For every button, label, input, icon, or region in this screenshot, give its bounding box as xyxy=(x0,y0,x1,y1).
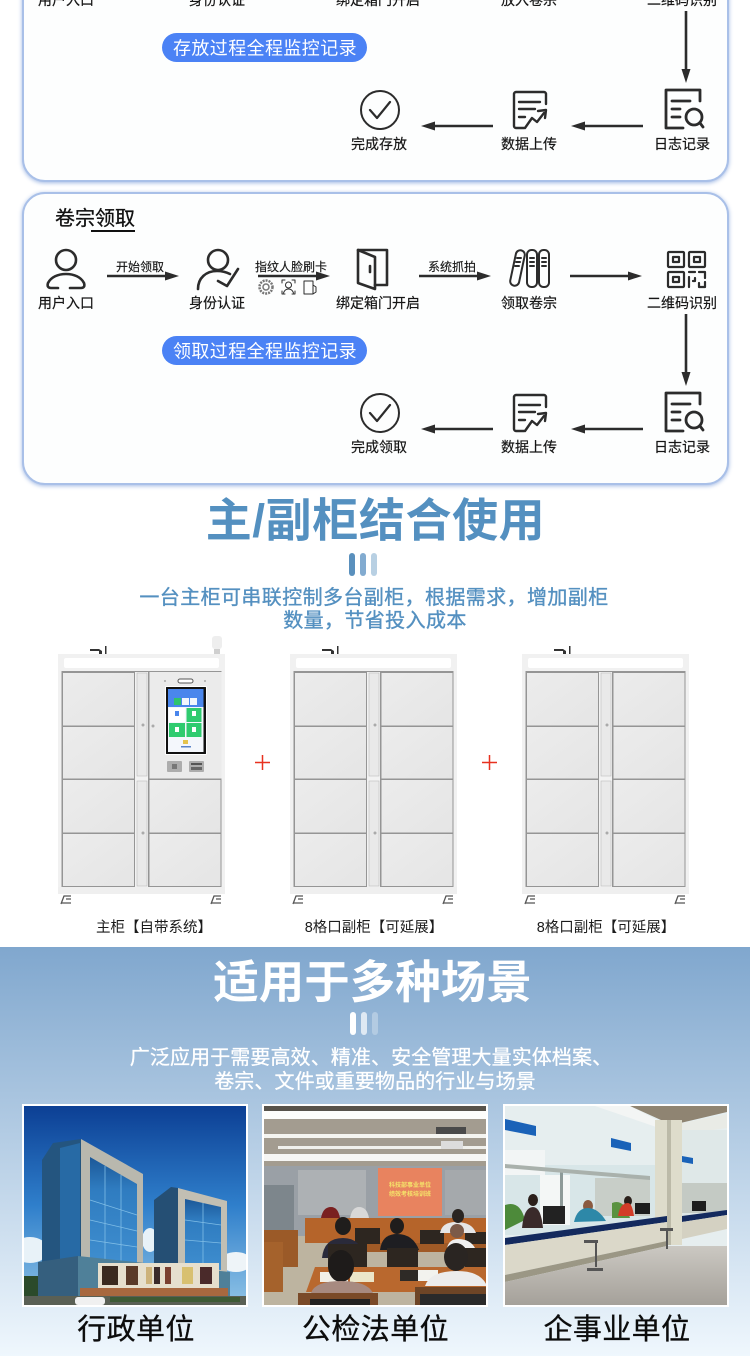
decoration: three bars xyxy=(349,553,377,576)
step: log record xyxy=(654,90,710,152)
step: data upload xyxy=(501,92,557,152)
arrow: qr to log xyxy=(682,314,690,386)
plus sign xyxy=(482,755,497,770)
pill: storage monitoring: 存放过程全程监控记录 xyxy=(173,38,357,58)
caption: sub cabinet extension: 8格口副柜【可延展】 xyxy=(537,919,675,936)
step: log record xyxy=(654,393,710,455)
step: user entry: 用户入口 xyxy=(38,295,94,311)
step: user entry xyxy=(38,250,94,311)
step: qr code xyxy=(647,252,717,311)
arrow: fingerprint face card: 指纹人脸刷卡 xyxy=(255,259,327,274)
photo: service hall xyxy=(503,1104,729,1307)
step: retrieval complete: 完成领取 xyxy=(351,439,407,455)
arrow: upload to complete xyxy=(421,424,493,434)
step: retrieval complete xyxy=(351,394,407,455)
step: door opens: 绑定箱门开启 xyxy=(336,295,420,311)
panel: retrieval flow xyxy=(23,193,728,484)
subtitle: scenario description: 卷宗、文件或重要物品的行业与场景 xyxy=(214,1070,536,1093)
photo: conference room xyxy=(262,1104,488,1307)
decoration: three bars xyxy=(350,1012,378,1035)
label: enterprises and institutions: 企事业单位 xyxy=(543,1313,691,1346)
pill: retrieval monitoring: 领取过程全程监控记录 xyxy=(173,342,357,362)
icons: fingerprint, face, card xyxy=(260,280,316,294)
step: storage complete xyxy=(351,91,407,152)
step: retrieve file xyxy=(501,249,557,311)
subtitle: cabinet description: 一台主柜可串联控制多台副柜，根据需求，增加副柜 xyxy=(139,586,609,609)
subtitle: scenario description: 广泛应用于需要高效、精准、安全管理大量实体档案、 xyxy=(130,1046,612,1069)
label: public security and legal: 公检法单位 xyxy=(302,1313,449,1346)
step: log record: 日志记录 xyxy=(654,439,710,455)
subtitle: cabinet description: 数量，节省投入成本 xyxy=(283,609,467,632)
arrow: to log record xyxy=(682,11,690,83)
step labels row one xyxy=(38,0,717,8)
step: retrieve file: 领取卷宗 xyxy=(501,295,557,311)
plus sign xyxy=(255,755,270,770)
step: identity check: 身份认证 xyxy=(189,295,245,311)
arrow: log to upload xyxy=(571,122,643,130)
arrow: log to upload xyxy=(571,424,643,434)
pill: retrieval monitoring xyxy=(162,336,367,365)
step: door opens xyxy=(336,250,420,311)
step: storage complete: 完成存放 xyxy=(351,136,407,152)
caption: main cabinet: 主柜【自带系统】 xyxy=(96,919,212,936)
cabinet: sub 8-door xyxy=(290,646,457,904)
step: data upload: 数据上传 xyxy=(501,136,557,152)
title: main and sub cabinets: 主/副柜结合使用 xyxy=(206,494,545,546)
arrow: system capture xyxy=(419,259,491,280)
card reader buttons xyxy=(167,761,204,772)
heading: retrieval: 卷宗领取 xyxy=(55,207,135,230)
arrow: start retrieval: 开始领取 xyxy=(116,260,164,274)
arrow: system capture: 系统抓拍 xyxy=(428,259,476,274)
touch screen xyxy=(166,686,206,754)
panel: application scenarios xyxy=(0,947,750,1356)
subtitle: scenario description xyxy=(130,1046,612,1093)
label: administrative units: 行政单位 xyxy=(77,1313,195,1346)
title: scenarios: 适用于多种场景 xyxy=(213,957,532,1008)
photo: conference room: 科技部事业单位 xyxy=(389,1181,431,1189)
arrow: start retrieval xyxy=(107,260,179,280)
photo: office towers xyxy=(12,1104,252,1307)
arrow: upload to complete xyxy=(421,122,493,130)
step: data upload: 数据上传 xyxy=(501,439,557,455)
photo: conference room: 绩效考核培训班 xyxy=(389,1190,431,1198)
subtitle: cabinet description xyxy=(139,586,609,632)
arrow: to qr code xyxy=(570,272,642,280)
step: log record: 日志记录 xyxy=(654,136,710,152)
panel: storage flow xyxy=(23,0,728,181)
arrow: fingerprint face card xyxy=(255,259,330,280)
cabinet: sub 8-door extension xyxy=(522,646,689,904)
cabinet: main with touch screen xyxy=(58,636,225,904)
step: identity check xyxy=(189,250,245,311)
pill: storage monitoring xyxy=(162,33,367,62)
step: qr code: 二维码识别 xyxy=(647,295,717,311)
step: data upload xyxy=(501,395,557,455)
caption: sub cabinet: 8格口副柜【可延展】 xyxy=(305,919,443,936)
